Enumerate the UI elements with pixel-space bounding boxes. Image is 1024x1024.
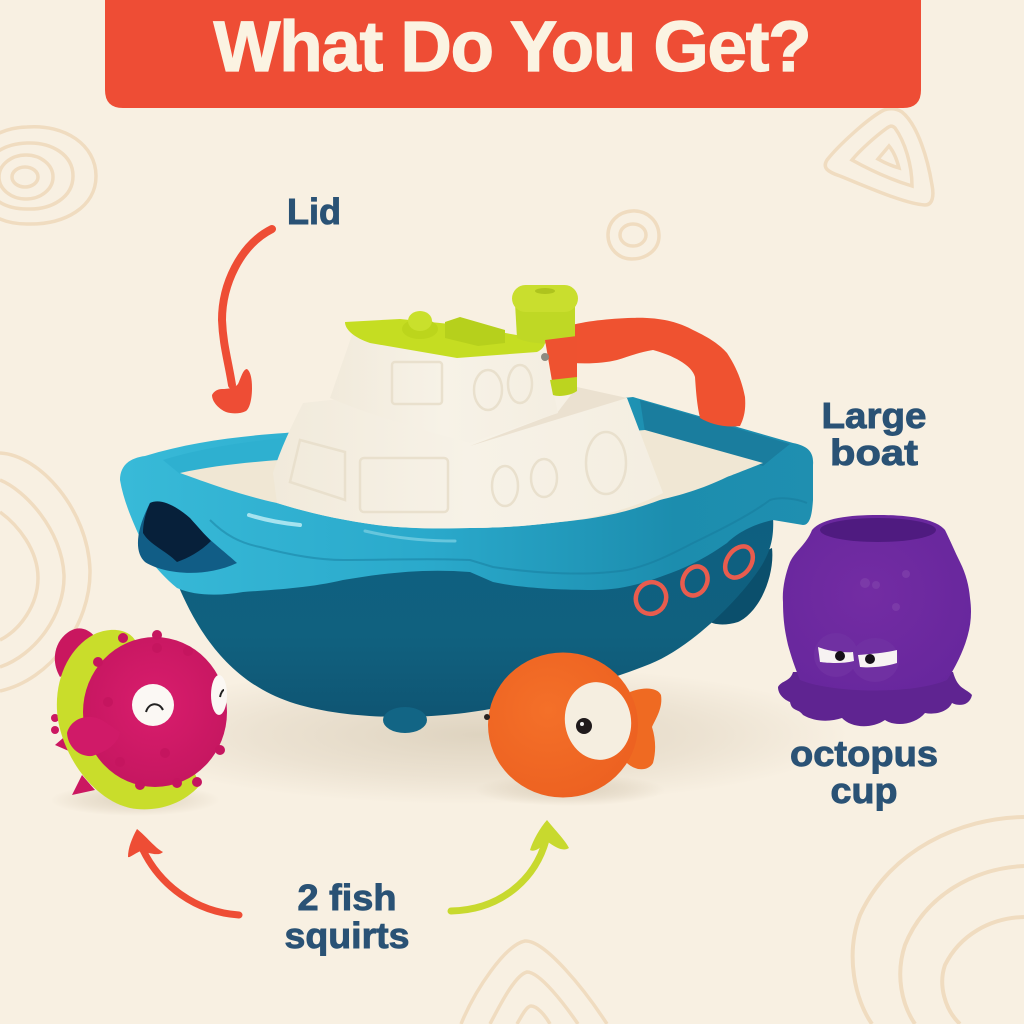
skirt tentacles bbox=[778, 672, 972, 726]
decorative contour: small ring bbox=[608, 211, 659, 259]
label: 2 fish squirts: squirts bbox=[284, 915, 410, 956]
cup body bbox=[783, 515, 971, 690]
label: 2 fish squirts bbox=[284, 877, 410, 956]
lime band bbox=[57, 630, 200, 809]
arrow: to orange fish bbox=[451, 820, 569, 911]
cabin upper bbox=[330, 335, 558, 443]
label: Large boat: boat bbox=[830, 432, 918, 473]
label: octopus cup: octopus bbox=[790, 733, 938, 774]
label: Lid: Lid bbox=[287, 191, 341, 232]
eye bumps bbox=[814, 633, 858, 677]
large boat bbox=[120, 285, 813, 733]
body bbox=[488, 652, 638, 798]
funnel bbox=[512, 285, 578, 396]
boat hull bbox=[178, 515, 773, 717]
header banner bbox=[105, 0, 921, 108]
label: octopus cup: cup bbox=[830, 770, 898, 811]
outer spikes bbox=[51, 714, 95, 795]
decorative contour: bottom centre bbox=[461, 941, 607, 1024]
cabin outlines bbox=[290, 432, 626, 512]
label: 2 fish squirts: 2 fish bbox=[298, 877, 396, 918]
spout bbox=[138, 501, 237, 573]
boat deck bbox=[180, 430, 763, 528]
top fin bbox=[55, 628, 95, 677]
orange fish bbox=[475, 652, 665, 806]
body bbox=[83, 637, 227, 787]
octopus cup bbox=[778, 515, 972, 726]
front rim highlights bbox=[210, 498, 807, 574]
decorative contour: top right triangle bbox=[825, 109, 933, 205]
rear rim inner face bbox=[640, 400, 790, 466]
tail bbox=[620, 688, 661, 769]
label: octopus cup bbox=[790, 733, 938, 811]
label: Large boat: Large bbox=[822, 395, 926, 436]
decorative contour: top left circle bbox=[0, 127, 96, 224]
portholes bbox=[631, 541, 759, 619]
hull wheel bbox=[383, 707, 427, 733]
lid bbox=[345, 311, 545, 358]
head bumps bbox=[860, 570, 910, 611]
decorative contour: left oval bbox=[0, 453, 90, 691]
spikes bbox=[93, 630, 225, 790]
eye bbox=[559, 677, 637, 765]
boat handle bbox=[572, 318, 745, 427]
eyes bbox=[132, 684, 174, 726]
arrow: lid bbox=[212, 229, 272, 413]
pufferfish bbox=[50, 628, 227, 816]
boat rear wheel bbox=[708, 548, 772, 624]
label: Large boat bbox=[822, 395, 926, 473]
boat shadow bbox=[110, 665, 850, 805]
arrow: to pufferfish bbox=[128, 829, 239, 915]
mouth fin bbox=[67, 717, 120, 756]
decorative contour: bottom right bbox=[853, 817, 1024, 1024]
cabin lower bbox=[273, 387, 663, 528]
title: What Do You Get? bbox=[214, 8, 812, 87]
boat rim silhouette bbox=[120, 397, 813, 595]
